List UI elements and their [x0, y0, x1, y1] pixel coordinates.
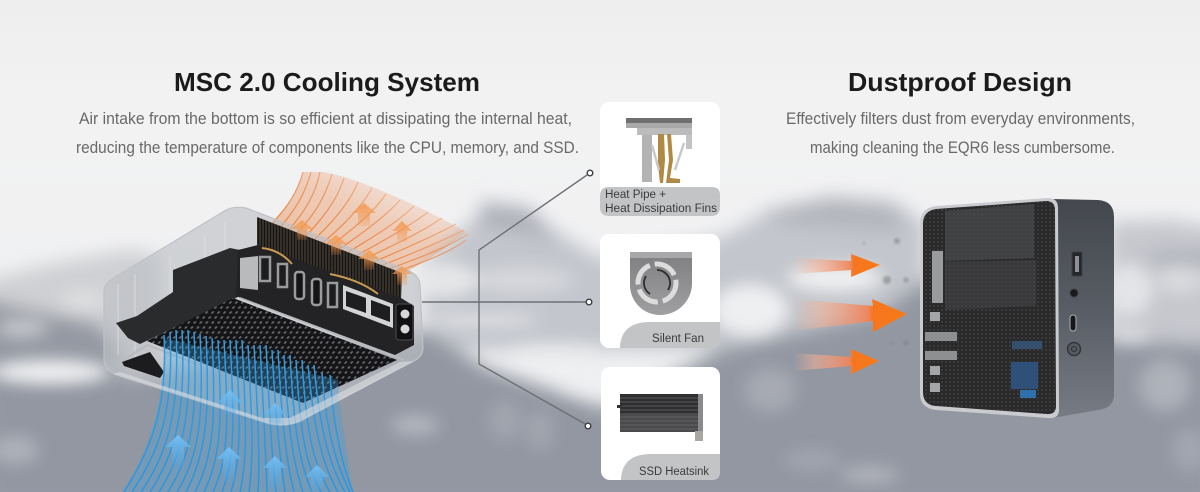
heading: Dustproof Design: Dustproof Design	[848, 67, 1072, 97]
case ribs	[118, 222, 225, 365]
icon: SSD heatsink	[617, 394, 703, 441]
bottom mesh plate	[147, 298, 397, 403]
label: heat pipe	[600, 187, 720, 216]
lower case edge overlay	[112, 361, 414, 426]
I/O ports	[260, 257, 413, 340]
side ports	[1068, 252, 1082, 356]
icon: blower fan	[630, 252, 692, 315]
text block: dustproof description: making cleaning the EQR6 less cumbersome.	[810, 139, 1115, 157]
lower board corner	[122, 352, 164, 378]
hot airflow streams	[262, 172, 468, 274]
metal chassis side	[1052, 199, 1114, 418]
motherboard edge	[122, 298, 404, 365]
cold airflow streams	[122, 330, 353, 492]
heat dissipation fins	[257, 217, 402, 300]
text block: cooling description: reducing the temperature of components like the CPU, memory, and SSD.	[76, 139, 579, 157]
text block: cooling description	[76, 110, 579, 157]
connector lines to component cards	[422, 170, 593, 429]
text block: cooling description: Air intake from the bottom is so efficient at dissipating the internal heat,	[79, 110, 572, 128]
label: heat pipe: Heat Pipe +	[605, 187, 666, 201]
mesh front panel	[923, 201, 1056, 414]
text block: dustproof description: Effectively filters dust from everyday environments,	[786, 110, 1135, 128]
pale haze layer	[0, 250, 160, 420]
icon: heat pipe and fins	[626, 118, 692, 183]
label: silent fan: Silent Fan	[652, 331, 704, 345]
internal fan shadow	[116, 248, 240, 344]
text block: dustproof description	[786, 110, 1135, 157]
label: heat pipe: Heat Dissipation Fins	[605, 201, 717, 215]
dust arrows	[793, 254, 907, 374]
panel: silent fan card	[600, 234, 720, 348]
internal components	[925, 204, 1042, 398]
panel: SSD heatsink card	[601, 367, 720, 480]
transparent case	[104, 207, 423, 425]
dust particles	[863, 238, 908, 346]
label: SSD heatsink: SSD Heatsink	[639, 464, 710, 478]
metal bracket	[240, 256, 258, 290]
bright snow patches and cloud streaks	[0, 262, 1200, 483]
illustration: dust filter mini PC	[793, 198, 1114, 418]
illustration: mini PC exploded cooling view	[104, 172, 468, 492]
air-direction arrows	[165, 203, 412, 492]
dark mountain base	[0, 298, 130, 492]
panel: heat pipe card	[600, 102, 720, 216]
front frame	[920, 198, 1059, 418]
port panel	[236, 245, 414, 355]
heading: MSC 2.0 Cooling System: MSC 2.0 Cooling System	[174, 67, 480, 97]
copper heat pipes	[262, 248, 378, 294]
